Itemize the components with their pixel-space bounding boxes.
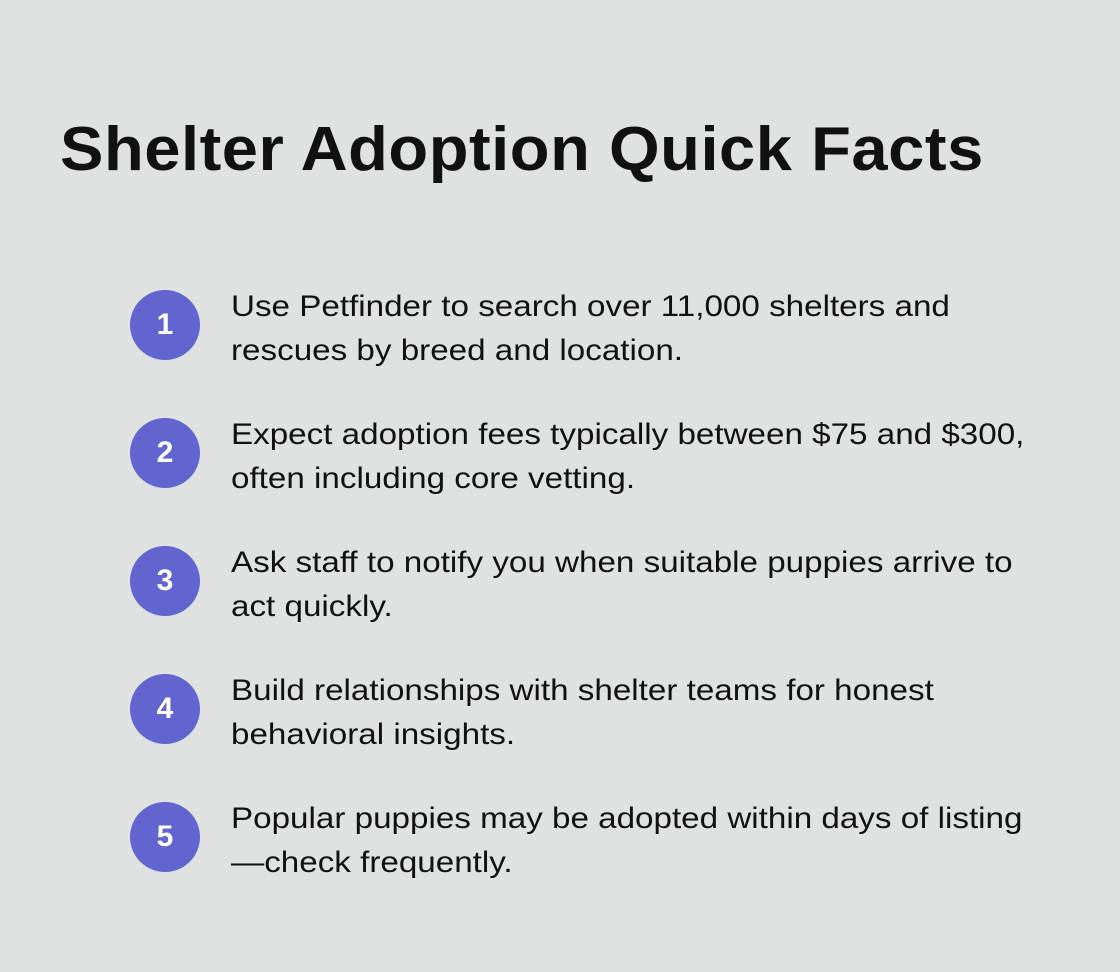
text 2: often including core vetting. — [231, 462, 635, 495]
item 1 — [130, 290, 950, 367]
item 3 — [130, 546, 1013, 623]
icon: number 2: 2 — [157, 436, 173, 469]
icon: number 1 — [130, 290, 200, 360]
text 5: —check frequently. — [231, 846, 513, 879]
icon: number 3: 3 — [157, 564, 173, 597]
item 4 — [130, 674, 934, 751]
icon: number 5 — [130, 802, 200, 872]
text 4: Build relationships with shelter teams for honest — [231, 674, 934, 707]
text 2: Expect adoption fees typically between $75 and $300, — [231, 418, 1024, 451]
text 4 — [231, 674, 934, 751]
icon: number 3 — [130, 546, 200, 616]
icon: number 4: 4 — [157, 692, 173, 725]
text 5: Popular puppies may be adopted within days of listing — [231, 802, 1022, 835]
icon: number 2 — [130, 418, 200, 488]
item 2 — [130, 418, 1024, 495]
text 1: Use Petfinder to search over 11,000 shelters and — [231, 290, 950, 323]
icon: number 5: 5 — [157, 820, 173, 853]
item 5 — [130, 802, 1022, 879]
text 1 — [231, 290, 950, 367]
text 2 — [231, 418, 1024, 495]
icon: number 4 — [130, 674, 200, 744]
text 5 — [231, 802, 1022, 879]
text 1: rescues by breed and location. — [231, 334, 683, 367]
icon: number 1: 1 — [157, 308, 173, 341]
text 3: act quickly. — [231, 590, 393, 623]
text 3: Ask staff to notify you when suitable puppies arrive to — [231, 546, 1013, 579]
text 4: behavioral insights. — [231, 718, 515, 751]
text 3 — [231, 546, 1013, 623]
title: Shelter Adoption Quick Facts — [60, 115, 984, 184]
